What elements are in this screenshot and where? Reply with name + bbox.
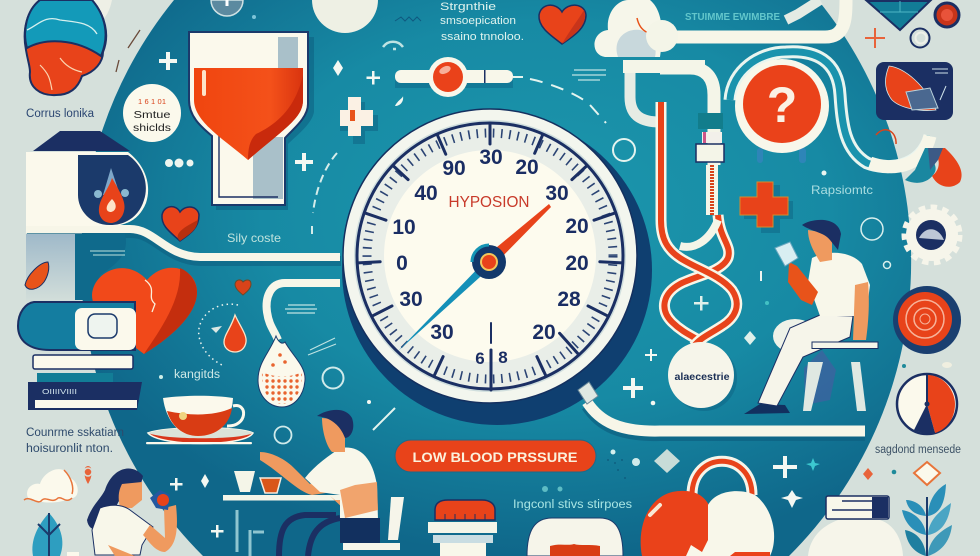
person sitting and drinking [744,220,878,414]
callout bubble: Smtue [134,110,171,121]
text block: lower left [26,427,124,455]
gauge numbers: 90 [442,157,466,180]
speckles near banner [607,450,640,479]
person at table [223,410,404,556]
gauge numbers: 20 [532,321,556,344]
text block: lower left: hoisuronlit nton. [26,443,113,455]
icon: tube and speckled bulb [258,283,340,407]
icon: cloud bottom left [24,469,78,503]
dashes near organ [116,30,140,72]
icon: orange teal shape [905,148,962,187]
icon: ball labelled [668,342,737,411]
gauge numbers: 10 [392,216,416,239]
gauge numbers: 20 [515,156,539,179]
top right caption: STUIMME EWIMBRE [685,11,780,23]
face and hair [322,418,345,452]
gauge numbers: 20 [565,215,589,238]
icon: heart with arc bottom right [641,461,774,556]
gauge numbers: 40 [414,182,438,205]
caption: right lower: sagdond mensede [875,444,961,456]
icon: box with flame [26,131,148,226]
text block: top center: Strgnthie [440,1,496,13]
gauge numbers: 0 [396,252,408,275]
gauge connector and long bottom tube [578,382,865,435]
decorative column under box [26,234,126,304]
icon: clock gauge [897,374,957,434]
caption: sily coste: Sily coste [227,231,281,245]
icon: white pipe and stethoscope tube [623,60,714,215]
icon: big broken heart [92,268,197,354]
heading text: left upper label: Corrus lonika [26,108,95,120]
icon: white medical cross [340,97,378,144]
icon: small marks over right area [863,362,952,485]
chair [279,515,340,556]
callout bubble: 1 6 1 01 [138,97,166,106]
caption: rapsiomtc: Rapsiomtc [811,183,873,197]
needle [398,204,551,351]
torso [305,447,378,520]
icon: tea cup and saucer [146,396,253,444]
icon: question mark circle with ribbon: ? [767,77,797,133]
banner: low blood pressure: LOW BLOOD PRSSURE [412,449,578,465]
icon: spiral disc [893,286,961,354]
callout bubble [123,84,181,142]
icon: small heart [162,207,199,241]
icon: small black ring [910,28,930,48]
text block: lower left: Counrme sskatiarn [26,427,124,439]
icon: blue leaf [32,513,79,556]
icon: orange cross [740,182,793,233]
gauge numbers: 6 [475,349,485,368]
icon: jar bottom right [808,496,903,556]
dashed curve right of glass [312,153,337,237]
icon: stacked books: OIIIIVIIII [42,389,77,396]
long white tube from left box to gauge [26,229,341,261]
person: woman with pill [87,468,177,556]
top long tube [646,0,846,52]
gauge: low blood pressure dial [342,109,652,425]
rings and dots right of cross [861,218,890,268]
icon: navy card [876,62,953,120]
icon: small gem heart [235,280,251,295]
icon: question mark circle with ribbon [730,52,930,167]
gauge label: HYPOSION [448,194,530,211]
major ticks [358,124,622,390]
gauge numbers: 20 [565,252,589,275]
dashed curve from thermometer [513,77,606,123]
gauge numbers [392,146,589,368]
icon: orange U tube and twist with ball [661,102,737,346]
icon: gear [906,209,958,261]
icon: blue plant [902,484,952,556]
icon: pill bottle [428,500,497,556]
icon: ball labelled: alaecestrie [674,371,730,383]
icon: orange plus [865,28,885,48]
gauge numbers: 30 [545,182,569,205]
icon: tube connectors [696,113,724,162]
icon: plus and star signs [159,52,657,538]
icon: location pin [84,466,92,484]
icon: organ heart top left [25,0,112,95]
cups [234,471,281,493]
text block: top center: ssaino tnnoloo. [441,31,524,43]
icon: cloud top [594,0,662,57]
top decorative elements [211,0,421,49]
text block: top center: smsoepication [440,15,516,27]
chair back [388,497,404,540]
callout bubble: shiclds [133,123,171,134]
table [223,495,345,500]
icon: heart top [539,5,586,44]
gauge numbers: 30 [479,146,503,169]
decorative lines and rings [274,70,635,444]
caption: bottom center [513,486,632,511]
icon: white shield box [527,518,623,556]
banner: low blood pressure [395,440,596,472]
icon: pill thermometer [395,57,513,97]
arm [260,452,332,495]
gauge numbers: 28 [557,288,581,311]
icon: blood glass [189,32,314,210]
caption: bottom center: Ingconl stivs stirpoes [513,499,632,511]
icon: orange drop [25,262,49,289]
text block: top center [440,1,524,43]
icon: orange ring [935,3,959,27]
icon: dotted circle with drop [199,304,246,365]
gauge numbers: 30 [430,321,454,344]
gauge numbers: 8 [498,348,508,367]
gauge numbers: 30 [399,288,423,311]
icon: orange arc [876,130,896,144]
icon: stacked books [18,302,142,410]
icon: three dots [165,158,194,168]
caption: kangitds: kangitds [174,369,220,381]
icon: diamond top right [867,1,930,30]
plus signs right cluster [654,296,820,508]
